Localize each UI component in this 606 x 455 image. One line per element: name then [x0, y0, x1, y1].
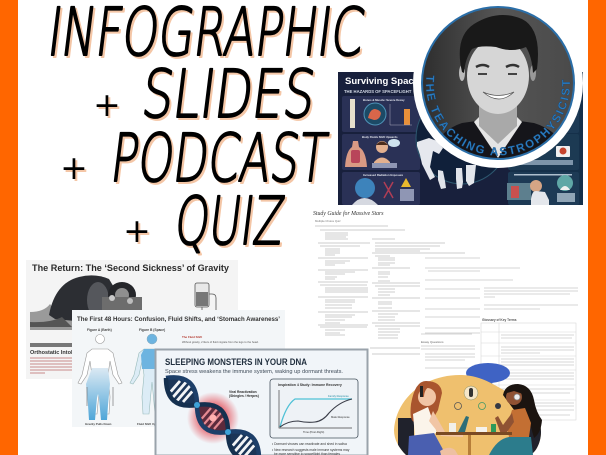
chart: inspiration 4 study immune recovery: Family Response	[328, 394, 349, 398]
icon: iv bag	[195, 283, 216, 314]
panel: study guide document: Study Guide for Massive Stars	[313, 210, 384, 217]
table: glossary of key terms	[481, 318, 576, 420]
panel: study guide document	[310, 206, 588, 455]
title: infographic + slides + podcast + quiz: +	[95, 87, 123, 126]
title: infographic + slides + podcast + quiz: SLIDES	[140, 58, 321, 135]
title: infographic + slides + podcast + quiz: QUIZ	[171, 183, 288, 260]
viral label: Viral Reactivation	[229, 390, 257, 394]
title: infographic + slides + podcast + quiz: QUIZ	[173, 185, 290, 262]
slide: sleeping monsters in your dna: Space stress weakens the immune system, waking up dormant threats.	[165, 369, 343, 375]
title: infographic + slides + podcast + quiz: PODCAST	[109, 122, 333, 199]
section label	[30, 343, 72, 347]
title: infographic + slides + podcast + quiz: +	[125, 213, 153, 252]
slide: the first 48 hours	[72, 310, 285, 427]
slide: the first 48 hours: The First 48 Hours: Confusion, Fluid Shifts, and ‘Stomach Awareness’	[77, 316, 280, 323]
slide: the return: Orthostatic Intolerance	[30, 350, 90, 356]
panel: surviving space infographic: Surviving Space	[345, 76, 419, 87]
ring text: THE TEACHING ASTROPHYSICIST	[426, 75, 570, 156]
right orange band	[588, 0, 606, 455]
title: infographic + slides + podcast + quiz: +	[123, 211, 151, 250]
portrait badge: the teaching astrophysicist	[413, 6, 583, 168]
hazard cards: right column	[507, 96, 579, 205]
title: infographic + slides + podcast + quiz: PODCAST	[107, 120, 331, 197]
quiz question lines, column 1	[315, 226, 405, 335]
table and props	[436, 386, 512, 455]
title: infographic + slides + podcast + quiz: +	[62, 150, 90, 189]
chart: inspiration 4 study immune recovery: Inspiration 4 Study: Immune Recovery	[278, 383, 342, 387]
red body text	[30, 358, 72, 373]
slide: sleeping monsters in your dna: SLEEPING MONSTERS IN YOUR DNA	[165, 357, 308, 367]
table: glossary of key terms: Glossary of Key Terms	[482, 318, 517, 322]
capsule	[30, 275, 143, 330]
hazard card: radiation: Increased Radiation Exposure	[363, 173, 404, 177]
fluid shift note: Without gravity, 2 liters of fluid migrate from the legs to the head.	[182, 340, 259, 344]
viral label	[229, 390, 259, 398]
figure a body: Gravity Pulls Down	[85, 422, 112, 426]
title: infographic + slides + podcast + quiz: SLIDES	[138, 56, 319, 133]
astronaut and orbit ring	[416, 92, 508, 189]
podcast illustration	[394, 363, 542, 455]
fluid shift note	[182, 335, 259, 344]
fluid shift note: The Fluid Shift	[182, 335, 202, 339]
slide: the first 48 hours: Figure B (Space)	[139, 328, 165, 332]
hazard card: body fluid shift	[342, 134, 420, 170]
chart: inspiration 4 study immune recovery: Male Response	[331, 415, 350, 419]
bullet points: • Dormant viruses can reactivate and shed in saliva	[272, 442, 347, 446]
title: infographic + slides + podcast + quiz: +	[93, 85, 121, 124]
figure b body	[130, 334, 174, 426]
hazard card: bones and muscles: Bones & Muscle: Severe Decay	[363, 98, 405, 102]
bullet points	[272, 442, 350, 455]
left orange band	[0, 0, 18, 455]
slide: sleeping monsters in your dna	[156, 350, 368, 455]
quiz question lines, column 2	[370, 239, 465, 354]
woman with red hair	[408, 381, 463, 455]
portrait photo	[443, 15, 554, 158]
slide: the first 48 hours: Figure A (Earth)	[87, 328, 112, 332]
title: infographic + slides + podcast + quiz: +	[60, 148, 88, 187]
panel: surviving space infographic: THE HAZARDS OF SPACEFLIGHT	[344, 89, 412, 94]
essay lines	[421, 346, 475, 368]
speech bubble	[466, 363, 510, 390]
hazard card: radiation	[342, 172, 420, 205]
hazard card: bones and muscles	[342, 96, 420, 132]
figure a body	[78, 334, 122, 426]
dna helix	[166, 377, 259, 455]
chart: inspiration 4 study immune recovery: Time (Post-Flight)	[303, 430, 324, 434]
short answer lines	[421, 258, 578, 334]
hazard card: body fluid shift: Body Fluids Shift Upwards	[362, 135, 398, 139]
viral label: (Shingles / Herpes)	[229, 394, 259, 398]
panel: study guide document: Multiple Choice Quiz	[315, 219, 341, 223]
title: infographic + slides + podcast + quiz	[44, 0, 370, 262]
slide: the return	[26, 260, 238, 379]
yellow backdrop	[394, 375, 541, 455]
bullet points: • New research suggests male immune systems may	[272, 448, 350, 452]
panel: surviving space infographic	[338, 72, 583, 205]
chart: inspiration 4 study immune recovery	[270, 379, 358, 438]
woman with dark hair	[489, 384, 542, 455]
figure b body: Fluid Shift Up	[137, 422, 156, 426]
slide: the return: The Return: The ‘Second Sickness’ of Gravity	[32, 263, 230, 273]
panel: study guide document: Essay Questions	[421, 340, 444, 344]
